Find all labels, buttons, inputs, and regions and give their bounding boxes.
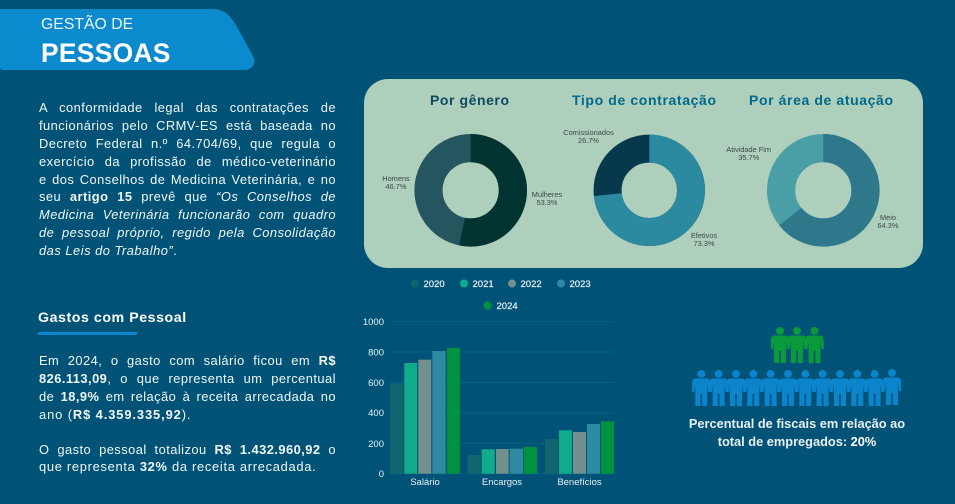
banner: section title: [0, 9, 254, 70]
donut labels: [382, 128, 899, 248]
donut: contratacao: [608, 149, 691, 232]
donut labels: 73.3%: [694, 239, 715, 248]
x axis labels: Benefícios: [557, 477, 602, 488]
y axis and gridlines: 400: [368, 408, 384, 419]
x axis labels: Salário: [410, 477, 440, 488]
donut labels: 46.7%: [386, 182, 407, 191]
text block: salary spending: [39, 353, 336, 422]
bars: salario: [390, 348, 460, 474]
icon: blue people: [692, 369, 901, 406]
heading: por genero: Por gênero: [430, 92, 509, 108]
text block: legal compliance intro: funcionários pelo CRMV-ES está baseada no: [39, 118, 336, 133]
text block: legal compliance intro: seu artigo 15 prevê que “Os Conselhos de: [39, 189, 336, 204]
x axis labels: [410, 477, 602, 488]
donut labels: 26.7%: [578, 136, 599, 145]
icon: green people: [771, 327, 824, 363]
donut labels: 35.7%: [738, 153, 760, 162]
legend: 2022: [520, 279, 542, 290]
caption: fiscais percentage: [689, 416, 905, 448]
text block: gastos heading: Gastos com Pessoal: [38, 310, 187, 326]
y axis and gridlines: [363, 317, 614, 480]
text block: legal compliance intro: Medicina Veterinária funcionarão com quadro: [39, 207, 336, 222]
text block: total personnel spending: [39, 442, 336, 474]
legend: 2021: [472, 279, 494, 290]
heading: tipo de contratacao: Tipo de contratação: [572, 92, 716, 108]
panel: donut charts: [364, 79, 923, 268]
text block: legal compliance intro: de pessoal próprio, regido pela Consolidação: [39, 225, 336, 240]
y axis and gridlines: 800: [368, 348, 384, 358]
text block: legal compliance intro: e dos Conselhos de Medicina Veterinária, e no: [39, 172, 336, 187]
donut labels: Homens: [382, 174, 410, 183]
heading: por area de atuacao: Por área de atuação: [749, 92, 893, 108]
y axis and gridlines: 0: [379, 469, 384, 480]
donut charts group: [382, 92, 899, 248]
text block: total personnel spending: O gasto pessoal totalizou R$ 1.432.960,92 o: [39, 442, 336, 456]
caption: fiscais percentage: Percentual de fiscais em relação ao: [689, 416, 905, 430]
text block: total personnel spending: que representa 32% da receita arrecadada.: [39, 459, 316, 474]
donut labels: Meio: [880, 213, 896, 222]
text block: salary spending: de 18,9% em relação à receita arrecadada no: [39, 389, 336, 404]
heading underline: [38, 332, 137, 335]
legend: 2024: [496, 301, 518, 312]
donut labels: Efetivos: [691, 231, 717, 240]
y axis and gridlines: 1000: [363, 317, 384, 328]
text block: legal compliance intro: das Leis do Trabalho”.: [39, 243, 177, 258]
legend: [411, 279, 591, 312]
donut labels: Atividade Fim: [726, 145, 771, 154]
text block: legal compliance intro: exercício da profissão de médico-veterinário: [39, 154, 336, 169]
y axis and gridlines: 200: [368, 439, 384, 450]
text block: salary spending: ano (R$ 4.359.335,92).: [39, 407, 191, 422]
donut labels: 53.3%: [537, 198, 558, 207]
text block: salary spending: Em 2024, o gasto com salário ficou em R$: [39, 353, 336, 368]
caption: fiscais percentage: total de empregados: 20%: [718, 434, 876, 448]
text block: legal compliance intro: A conformidade legal das contratações de: [39, 100, 336, 115]
donut labels: Mulheres: [532, 190, 562, 199]
x axis labels: Encargos: [482, 477, 522, 488]
donut: area: [781, 148, 866, 233]
donut labels: 64.3%: [878, 221, 899, 230]
y axis and gridlines: 600: [368, 378, 384, 389]
bars: beneficios: [545, 421, 614, 474]
banner: section title: PESSOAS: [41, 38, 171, 68]
banner: section title: GESTÃO DE: [41, 16, 133, 33]
text block: salary spending: 826.113,09, o que representa um percentual: [39, 371, 336, 386]
bars: encargos: [468, 447, 537, 474]
legend: 2020: [424, 279, 445, 290]
donut: genero: [428, 148, 513, 233]
text block: legal compliance intro: Decreto Federal n.º 64.704/69, que regula o: [39, 136, 336, 151]
donut labels: Comissionados: [563, 128, 614, 137]
legend: 2023: [570, 279, 591, 290]
text block: legal compliance intro: [39, 100, 336, 258]
